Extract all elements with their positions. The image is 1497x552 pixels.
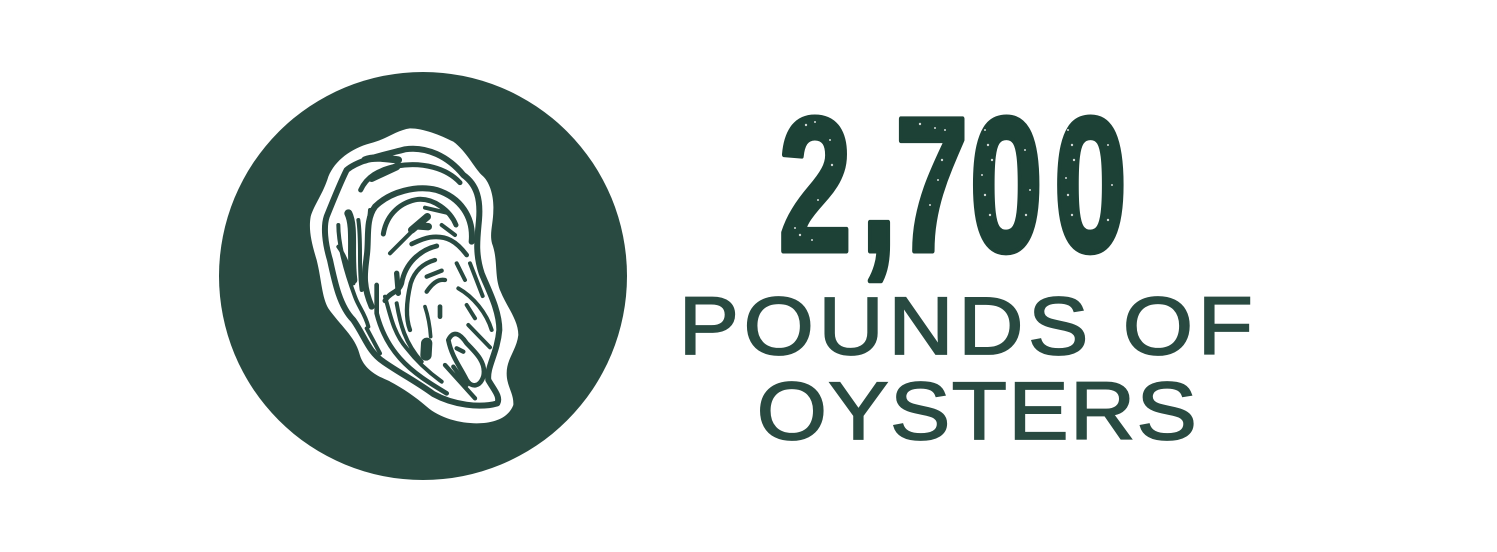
big number: 2,700: 2 [778, 78, 852, 292]
big number: 2,700: , [860, 78, 897, 292]
big number: 2,700: 0 [969, 78, 1043, 292]
label: POUNDS OF: POUNDS OF [679, 281, 1253, 372]
outer shell contour [325, 149, 499, 406]
icon background circle [219, 72, 627, 480]
big number: 2,700: 0 [1054, 78, 1127, 292]
big number: 2,700: 7 [895, 78, 969, 292]
icon: oyster in green circle [219, 72, 627, 480]
inner shell contours [361, 165, 460, 190]
big number: 2,700 [778, 78, 1127, 292]
hinge whorl [448, 334, 484, 385]
print texture speckles [794, 121, 1113, 241]
oyster shell drawing [310, 128, 518, 423]
label: OYSTERS: OYSTERS [757, 366, 1197, 457]
